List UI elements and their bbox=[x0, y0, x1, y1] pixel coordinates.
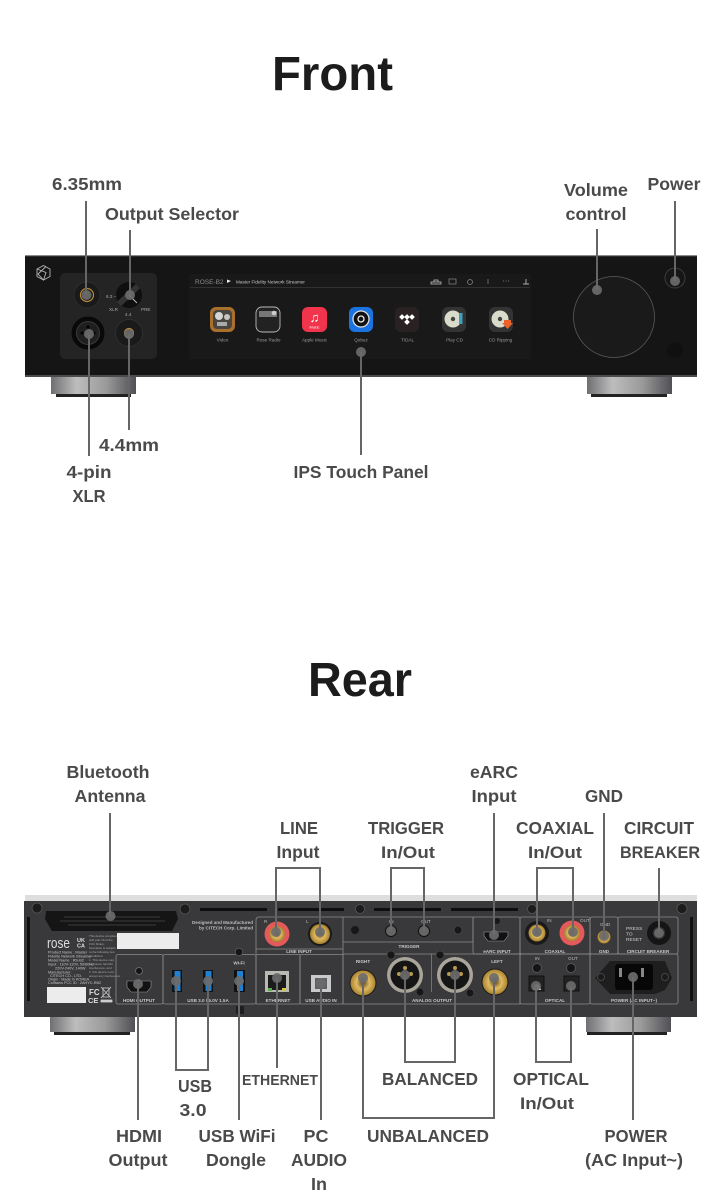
product spec: Product Name : Master bbox=[48, 950, 88, 954]
callout: eARC Input bbox=[470, 762, 518, 940]
jack: 4-pin XLR bbox=[72, 316, 104, 350]
sensor bbox=[667, 342, 683, 358]
fine print: FCC Rules. bbox=[89, 942, 105, 946]
panel: line input: L bbox=[306, 919, 309, 924]
panel: coaxial: IN bbox=[547, 918, 552, 923]
panel: GND: GND bbox=[599, 949, 610, 954]
callout: PC AUDIO In: In bbox=[311, 1174, 327, 1194]
panel: circuit breaker: TO bbox=[626, 932, 633, 938]
panel: power AC input bbox=[590, 954, 678, 1004]
app: CD Ripping bbox=[489, 307, 513, 332]
product spec: Contains FCC ID : 2AHYC-RB2 bbox=[48, 981, 101, 985]
callout: Bluetooth Antenna: Antenna bbox=[74, 786, 146, 806]
selector labels: 4.4 bbox=[125, 312, 132, 317]
jack: 6.35mm bbox=[74, 282, 100, 308]
maker text: Designed and Manufactured bbox=[192, 920, 253, 925]
callout: HDMI Output: HDMI bbox=[116, 1126, 162, 1146]
button: power bbox=[665, 268, 685, 288]
label: TIDAL: TIDAL bbox=[401, 338, 414, 342]
product spec: Manufacturer : bbox=[48, 970, 72, 974]
panel: optical: IN bbox=[535, 956, 540, 961]
icon: WEEE bin bbox=[101, 987, 112, 1002]
label: CD Ripping: CD Ripping bbox=[489, 338, 513, 342]
label: Qobuz: Qobuz bbox=[354, 338, 368, 342]
callout: BALANCED bbox=[382, 970, 478, 1089]
mark: UK CA: CA bbox=[77, 944, 85, 950]
callout: ETHERNET: ETHERNET bbox=[242, 1072, 318, 1089]
callout: UNBALANCED bbox=[358, 973, 499, 1146]
foot: front right bbox=[587, 377, 672, 397]
callout: TRIGGER In/Out: TRIGGER bbox=[368, 818, 444, 838]
chassis: rear bbox=[24, 901, 697, 1017]
callout: Bluetooth Antenna bbox=[66, 762, 150, 921]
callout: OPTICAL In/Out: OPTICAL bbox=[513, 1069, 589, 1089]
callout: LINE Input: LINE bbox=[280, 818, 318, 838]
callout: 6.35mm: 6.35mm bbox=[52, 174, 122, 194]
panel: USB audio in: USB AUDIO IN bbox=[305, 998, 337, 1003]
panel: Ethernet: ETHERNET bbox=[266, 998, 291, 1003]
product spec: 220V-240V, 140W bbox=[55, 966, 86, 970]
app: Video bbox=[210, 307, 235, 332]
panel: coaxial: OUT bbox=[580, 918, 590, 923]
panel: line input bbox=[256, 917, 343, 954]
app: TIDAL bbox=[395, 307, 419, 332]
callout: POWER AC Input: (AC Input~) bbox=[585, 1150, 683, 1170]
app: Apple Music: ♫ bbox=[310, 310, 319, 325]
panel: trigger bbox=[343, 917, 473, 949]
callout: CIRCUIT BREAKER: BREAKER bbox=[620, 844, 700, 862]
panel: USB 3.0 bbox=[163, 948, 256, 1014]
callout: Volume control: Volume bbox=[564, 180, 628, 200]
panel: eARC input: eARC INPUT bbox=[483, 949, 511, 954]
side notches bbox=[27, 917, 693, 1001]
callout: USB WiFi Dongle: USB WiFi bbox=[198, 1126, 276, 1146]
status bar icons bbox=[431, 279, 529, 284]
panel: circuit breaker: RESET bbox=[626, 937, 642, 943]
callout: 4.4mm: 4.4mm bbox=[99, 435, 159, 455]
callout: 4.4mm bbox=[99, 329, 159, 455]
callout: Volume control bbox=[564, 180, 628, 295]
panel: optical bbox=[520, 954, 590, 1004]
panel: trigger: OUT bbox=[421, 919, 431, 924]
callout: LINE Input: Input bbox=[276, 842, 320, 862]
callout: Volume control: control bbox=[566, 204, 626, 224]
top cover strip bbox=[25, 895, 697, 902]
icon: Rose logo bbox=[37, 266, 50, 280]
device: front panel bbox=[25, 255, 697, 397]
callout: Output Selector: Output Selector bbox=[105, 204, 239, 224]
app: Rose Radio bbox=[256, 307, 280, 332]
fine print: not cause harmful bbox=[89, 962, 113, 966]
white sticker: left bbox=[47, 987, 86, 1003]
selector labels bbox=[106, 294, 150, 317]
panel: HDMI output bbox=[116, 954, 163, 1004]
fine print: 1. This device may bbox=[89, 958, 114, 962]
product spec: Input : 110V-120V, 50/60Hz bbox=[48, 962, 94, 966]
vent slits bbox=[200, 908, 518, 911]
antenna: Bluetooth bbox=[45, 911, 178, 931]
panel: eARC input bbox=[473, 917, 520, 954]
panel: headphone and selector plate bbox=[60, 273, 157, 359]
callout: 4-pin XLR: 4-pin bbox=[66, 462, 112, 482]
callout: COAXIAL In/Out: In/Out bbox=[528, 844, 583, 862]
panel: HDMI output: HDMI OUTPUT bbox=[123, 998, 155, 1003]
callout: TRIGGER In/Out bbox=[368, 818, 444, 936]
fine print: to the following two bbox=[89, 950, 115, 954]
product spec: Model Name : RS-B2 bbox=[48, 958, 84, 962]
foot: rear right bbox=[586, 1017, 671, 1035]
callout: COAXIAL In/Out: COAXIAL bbox=[516, 818, 594, 838]
panel: optical: OPTICAL bbox=[545, 998, 565, 1003]
fine print: accept any interference bbox=[89, 974, 121, 978]
maker text bbox=[192, 920, 253, 930]
callout: eARC Input: Input bbox=[472, 786, 517, 806]
panel: trigger: TRIGGER bbox=[399, 944, 420, 949]
label: Rose Radio: Rose Radio bbox=[256, 338, 281, 342]
selector labels: 6.3 – bbox=[106, 294, 117, 299]
panel: coaxial: COAXIAL bbox=[545, 949, 566, 954]
product spec: Fidelity Network Streamer bbox=[48, 954, 92, 958]
panel: USB 3.0: USB 3.0 / 5.0V 1.5A bbox=[187, 998, 229, 1003]
panel: circuit breaker: PRESS bbox=[626, 926, 642, 932]
device: rear panel bbox=[24, 895, 697, 1035]
callout: CIRCUIT BREAKER: CIRCUIT bbox=[624, 818, 694, 838]
callout: USB WiFi Dongle bbox=[198, 976, 276, 1170]
callout: 4-pin XLR: XLR bbox=[72, 486, 106, 506]
foot: rear left bbox=[50, 1017, 135, 1035]
callout: IPS Touch Panel bbox=[294, 347, 428, 482]
jack: 4.4mm bbox=[116, 320, 142, 346]
panel: analog output: LEFT bbox=[491, 959, 503, 964]
selector labels: XLR bbox=[109, 307, 119, 312]
callout: Power bbox=[648, 174, 701, 286]
mark: UK CA: UK bbox=[77, 938, 85, 944]
callout: USB 3.0: USB bbox=[178, 1076, 212, 1096]
screen subtitle: Master Fidelity Network Streamer bbox=[236, 280, 305, 284]
brand: rose: rose bbox=[47, 935, 70, 952]
title: Front: Front bbox=[272, 48, 393, 101]
label: Video: Video bbox=[217, 338, 229, 342]
fine print: interference, and bbox=[89, 966, 112, 970]
mark: UK CA bbox=[77, 938, 85, 950]
callout: PC AUDIO In: PC bbox=[304, 1126, 329, 1146]
callout: PC AUDIO In: AUDIO bbox=[291, 1150, 347, 1170]
callout: OPTICAL In/Out bbox=[513, 981, 589, 1113]
panel: USB audio in bbox=[300, 954, 343, 1004]
selector labels: PRE bbox=[141, 307, 150, 312]
foot: front left bbox=[51, 377, 136, 397]
callout: GND bbox=[585, 786, 623, 941]
chassis: front bbox=[25, 255, 697, 377]
callout: LINE Input bbox=[271, 818, 325, 937]
panel: analog output: RIGHT bbox=[356, 959, 370, 964]
label: Apple Music: Apple Music bbox=[302, 338, 328, 342]
fine print: Operation is subject bbox=[89, 946, 116, 950]
callout: 6.35mm bbox=[52, 174, 122, 300]
white sticker: top bbox=[117, 933, 179, 949]
panel: IPS touch screen bbox=[189, 274, 531, 359]
product spec: Origin : Made in KOREA bbox=[48, 978, 90, 982]
callout: USB WiFi Dongle: Dongle bbox=[206, 1150, 266, 1170]
fine print: This device complies bbox=[89, 934, 117, 938]
callout: HDMI Output: Output bbox=[108, 1150, 168, 1170]
maker text: by CITECH Corp. Limited bbox=[199, 926, 253, 930]
panel: Ethernet bbox=[256, 954, 300, 1004]
callout: CIRCUIT BREAKER bbox=[620, 818, 700, 938]
fine print bbox=[89, 934, 121, 978]
panel: power AC input: POWER (AC INPUT~) bbox=[611, 998, 657, 1003]
callout: PC AUDIO In bbox=[291, 978, 347, 1194]
knob: output selector bbox=[116, 282, 142, 308]
callout: eARC Input: eARC bbox=[470, 762, 518, 782]
panel: line input: LINE INPUT bbox=[286, 949, 312, 954]
product spec: CITECH CO., LTD. bbox=[50, 974, 82, 978]
panel: USB 3.0: WI-FI bbox=[233, 960, 245, 966]
callout: POWER AC Input bbox=[585, 972, 683, 1170]
panel: GND: GND bbox=[600, 922, 611, 927]
screws bbox=[32, 903, 687, 914]
screen title: ROSE-B2 bbox=[195, 279, 224, 286]
callout: USB 3.0: 3.0 bbox=[180, 1100, 207, 1120]
regulatory marks CE: CE bbox=[88, 996, 98, 1005]
callout: ETHERNET bbox=[242, 973, 318, 1089]
fine print: 2. this device must bbox=[89, 970, 114, 974]
panel: coaxial bbox=[520, 917, 590, 954]
callout: Bluetooth Antenna: Bluetooth bbox=[66, 762, 150, 782]
panel: circuit breaker: CIRCUIT BREAKER bbox=[627, 949, 670, 954]
title: Rear: Rear bbox=[308, 654, 412, 707]
app: Qobuz bbox=[349, 307, 373, 332]
callout: POWER AC Input: POWER bbox=[604, 1126, 668, 1146]
app: Play CD bbox=[442, 307, 466, 332]
panel: trigger: IN bbox=[389, 919, 394, 924]
callout: HDMI Output bbox=[108, 979, 168, 1170]
fine print: conditions: bbox=[89, 954, 104, 958]
callout: OPTICAL In/Out: In/Out bbox=[520, 1095, 575, 1113]
label block: product info bbox=[47, 934, 121, 1005]
panel: analog output: ANALOG OUTPUT bbox=[412, 998, 452, 1003]
callout: 4-pin XLR bbox=[66, 329, 112, 506]
icon: play bbox=[227, 280, 231, 283]
callout: Power: Power bbox=[648, 174, 701, 194]
callout: TRIGGER In/Out: In/Out bbox=[381, 844, 436, 862]
callout: COAXIAL In/Out bbox=[516, 818, 594, 937]
callout: IPS Touch Panel: IPS Touch Panel bbox=[294, 462, 428, 482]
panel: analog output bbox=[343, 951, 520, 1004]
panel: optical: OUT bbox=[568, 956, 578, 961]
knob: volume bbox=[574, 276, 654, 358]
fine print: with part 15 of the bbox=[89, 938, 113, 942]
panel: line input: R bbox=[264, 919, 268, 924]
panel: circuit breaker bbox=[618, 917, 678, 954]
callout: GND: GND bbox=[585, 786, 623, 806]
app: Apple Music bbox=[302, 307, 327, 332]
regulatory marks: FC bbox=[89, 988, 100, 997]
panel: GND bbox=[590, 917, 618, 954]
callout: BALANCED: BALANCED bbox=[382, 1069, 478, 1089]
label: Play CD: Play CD bbox=[446, 338, 464, 342]
app: Apple Music: Music bbox=[310, 326, 320, 330]
product spec bbox=[48, 950, 101, 985]
callout: UNBALANCED: UNBALANCED bbox=[367, 1126, 489, 1146]
callout: Output Selector bbox=[105, 204, 239, 300]
callout: USB 3.0 bbox=[171, 976, 213, 1120]
